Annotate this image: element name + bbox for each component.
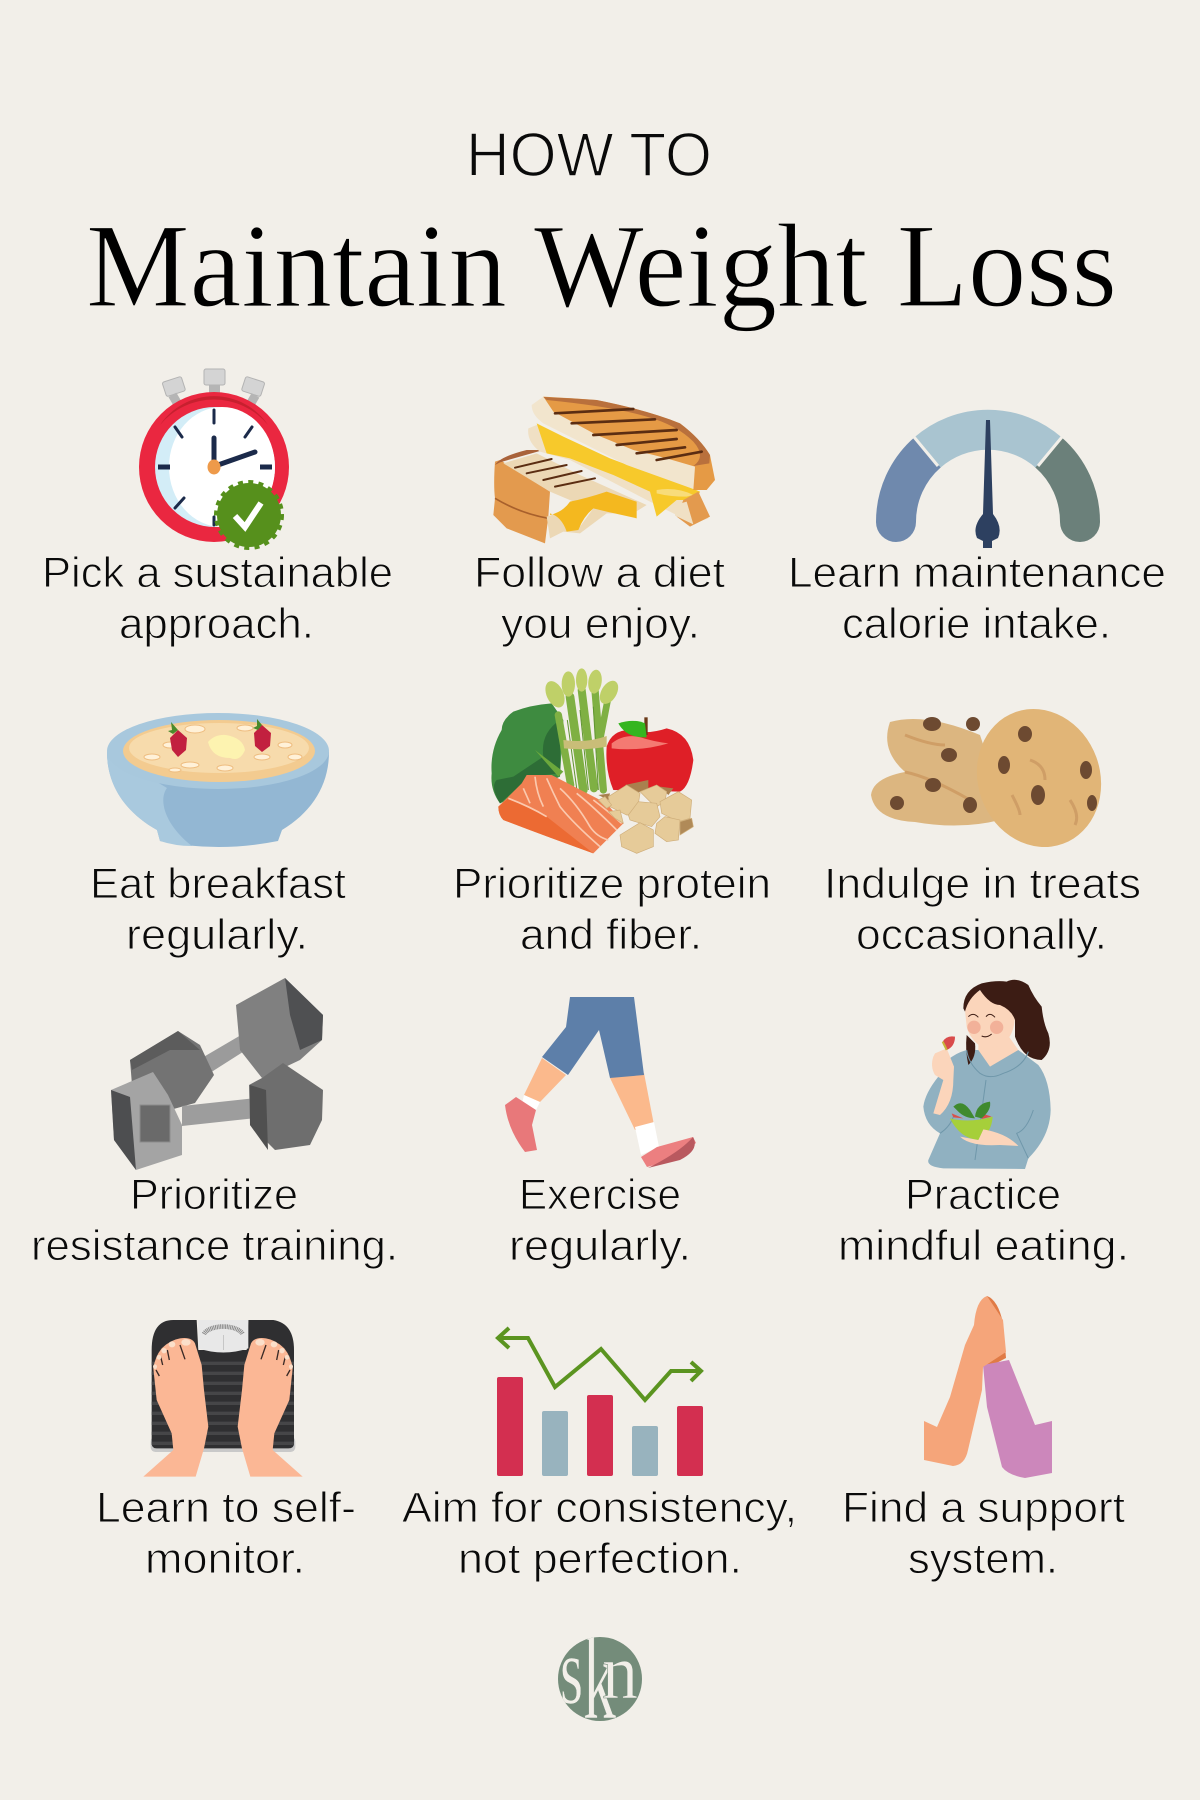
panel: learn maintenance calorie intake [788, 420, 1166, 648]
label: calorie intake. [842, 600, 1111, 648]
panel: follow a diet you enjoy [474, 397, 725, 648]
label: Eat breakfast [90, 860, 346, 908]
panel: indulge in treats occasionally [824, 691, 1141, 959]
panel: eat breakfast regularly [90, 713, 346, 959]
label [402, 1484, 797, 1583]
icon: walking legs [505, 997, 696, 1168]
icon: bowl of oatmeal [107, 713, 329, 847]
logo: skn monogram: n [602, 1628, 638, 1715]
label [31, 1171, 398, 1270]
icon: feet on a bathroom scale [143, 1320, 303, 1477]
label: Exercise [519, 1171, 681, 1219]
label [42, 549, 393, 648]
label: Indulge in treats [824, 860, 1141, 908]
label [96, 1484, 356, 1583]
icon: chocolate chip cookies [871, 691, 1120, 865]
label: monitor. [145, 1535, 305, 1583]
panel: prioritize resistance training [31, 978, 398, 1270]
label: Practice [905, 1171, 1061, 1219]
panel: find a support system [842, 1296, 1125, 1583]
label: Prioritize protein [453, 860, 771, 908]
panel: prioritize protein and fiber [453, 668, 771, 959]
label: and fiber. [520, 911, 702, 959]
icon: grilled cheese sandwich [493, 397, 715, 543]
label [842, 1484, 1125, 1583]
label: occasionally. [856, 911, 1107, 959]
logo: skn monogram: s [560, 1618, 583, 1724]
label: regularly. [509, 1222, 691, 1270]
icon: calorie gauge [896, 420, 1080, 548]
title: HOW TO [466, 121, 712, 190]
label: resistance training. [31, 1222, 398, 1270]
label: system. [908, 1535, 1058, 1583]
icon: woman eating salad [923, 980, 1051, 1169]
panel: pick a sustainable approach [42, 369, 393, 648]
label [824, 860, 1141, 959]
panel: aim for consistency, not perfection [402, 1328, 797, 1583]
label: mindful eating. [838, 1222, 1129, 1270]
icon: stopwatch with green check badge [139, 369, 289, 548]
label: regularly. [126, 911, 308, 959]
icon: high-five hands [924, 1296, 1052, 1478]
label: Find a support [842, 1484, 1125, 1532]
label [788, 549, 1166, 648]
title: Maintain Weight Loss [86, 199, 1117, 332]
panel: practice mindful eating [838, 980, 1129, 1270]
label: Aim for consistency, [402, 1484, 797, 1532]
label: not perfection. [458, 1535, 742, 1583]
label: Learn to self- [96, 1484, 356, 1532]
label [90, 860, 346, 959]
label: Learn maintenance [788, 549, 1166, 597]
logo: skn monogram: k [583, 1613, 616, 1744]
label: you enjoy. [501, 600, 700, 648]
title [86, 121, 1117, 332]
label [509, 1171, 691, 1270]
label: Prioritize [130, 1171, 298, 1219]
label [838, 1171, 1129, 1270]
panel: exercise regularly [505, 997, 696, 1270]
label: Follow a diet [474, 549, 725, 597]
icon: bar chart with green trend line [497, 1328, 703, 1476]
label [453, 860, 771, 959]
label: approach. [119, 600, 314, 648]
icon: dumbbells [111, 978, 323, 1170]
panel: learn to self-monitor [96, 1320, 356, 1583]
logo: skn monogram [558, 1637, 642, 1721]
icon: vegetables, apple, salmon and tofu [491, 668, 693, 853]
label: Pick a sustainable [42, 549, 393, 597]
label [474, 549, 725, 648]
